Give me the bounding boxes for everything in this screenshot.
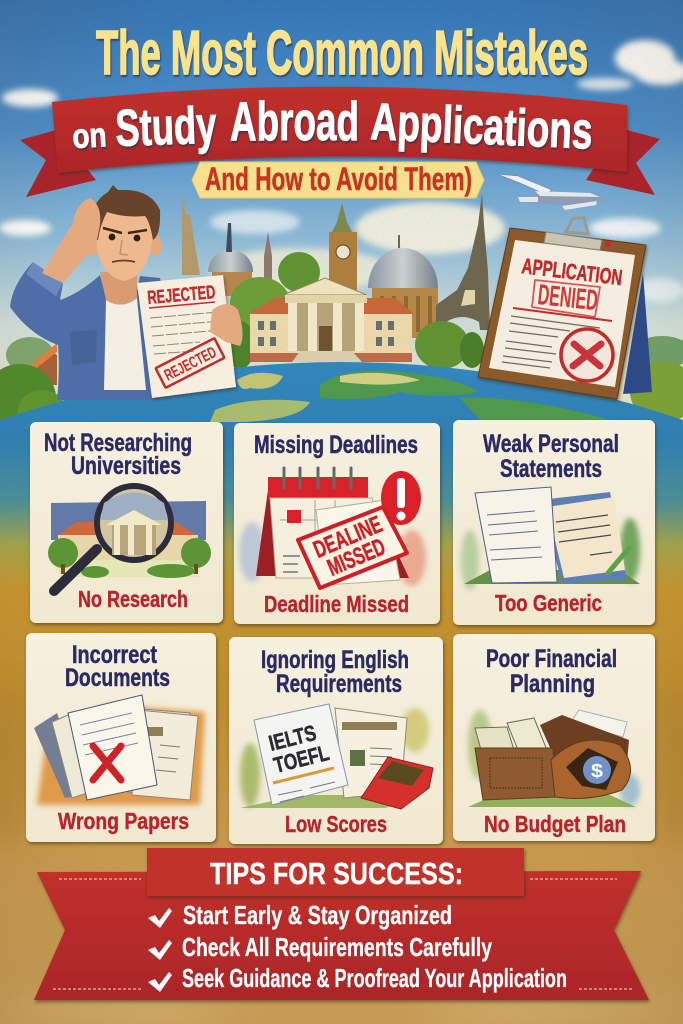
banner tails (20, 130, 96, 197)
rejected paper (137, 275, 236, 398)
forearm (42, 215, 100, 283)
rejected paper: REJECTED (162, 344, 219, 385)
card 6 heading (486, 645, 617, 698)
subtitle ribbon (192, 161, 484, 198)
clipboard: DENIED (536, 279, 599, 317)
head (95, 200, 153, 281)
deadline stamp: MISSED (324, 533, 389, 582)
neck (100, 272, 137, 305)
tip 2 (148, 932, 492, 962)
icon: ielts toefl paper and device: IELTS (266, 720, 319, 756)
banner text (71, 90, 594, 161)
card 6 caption: No Budget Plan (484, 811, 626, 837)
hair (91, 185, 160, 240)
icon: statements on folder (461, 487, 640, 590)
clock tower (329, 203, 357, 294)
large dome (368, 235, 438, 338)
subtitle ribbon: And How to Avoid Them) (205, 161, 472, 197)
background sky (0, 0, 683, 430)
icon: airplane (497, 174, 607, 210)
t-shirt (104, 298, 146, 390)
card: ignoring english requirements (229, 637, 443, 844)
tips header (147, 848, 524, 896)
tip 1 (148, 900, 452, 930)
globe (0, 362, 683, 1024)
tips body (34, 871, 649, 1000)
rejected paper: REJECTED (147, 282, 216, 309)
card 1 heading: Universities (71, 452, 181, 480)
card 5 heading (261, 646, 409, 698)
man character (10, 185, 243, 400)
card: not researching universities (30, 422, 223, 623)
hand on head (72, 198, 100, 250)
banner text: Applications (369, 93, 594, 161)
clip (544, 218, 611, 250)
tips header: TIPS FOR SUCCESS: (210, 856, 463, 891)
distant trees and house left (0, 337, 66, 432)
deadline stamp: DEALINE (309, 511, 386, 564)
icon: calendar and missed stamp (239, 468, 426, 588)
icon: ielts toefl paper and device: TOEFL (271, 740, 332, 778)
card 3 heading: Statements (500, 455, 602, 483)
hand on paper (210, 304, 243, 346)
banner text: Study (114, 97, 217, 158)
clipboard back (623, 273, 652, 394)
shirt (10, 262, 165, 400)
icon: wallet and bills (468, 710, 640, 807)
distant trees right (630, 336, 683, 422)
card 1 caption: No Research (78, 586, 188, 612)
deadline stamp (298, 507, 407, 588)
tip 2: Check All Requirements Carefully (182, 932, 492, 962)
card 1 heading (44, 429, 192, 480)
card 3 caption: Too Generic (495, 590, 602, 616)
card: poor financial planning (453, 634, 655, 841)
application denied stamp text: APPLICATION (520, 253, 624, 290)
title banner (20, 87, 660, 197)
card 4 heading: Documents (65, 664, 170, 692)
tips ribbon (34, 848, 649, 1000)
icon: campus under magnifier (48, 486, 211, 591)
paper (489, 240, 635, 387)
alert badge (381, 471, 421, 525)
clouds (0, 40, 683, 302)
banner text: Abroad (230, 90, 359, 152)
globe land masses (210, 371, 610, 422)
ears (86, 236, 162, 256)
card 5 caption: Low Scores (285, 811, 387, 837)
tip 1: Start Early & Stay Organized (183, 900, 452, 930)
rejected x circle (561, 329, 613, 381)
icon: wallet and bills: $ (591, 761, 603, 781)
card 3 heading (483, 430, 619, 483)
card 5 heading: Requirements (276, 670, 402, 698)
banner text: on (71, 116, 107, 156)
face features (103, 228, 147, 233)
landmark skyline (182, 193, 490, 369)
card: incorrect documents (26, 633, 216, 842)
university building (248, 278, 414, 362)
icon: ielts toefl paper and device (240, 704, 433, 809)
card 4 caption: Wrong Papers (58, 808, 189, 834)
obelisk tower (182, 193, 200, 275)
card: weak personal statements (453, 420, 655, 625)
card 2 caption: Deadline Missed (264, 591, 409, 617)
card: missing deadlines (234, 423, 440, 624)
card 4 heading: Incorrect (72, 641, 158, 669)
card 6 heading: Poor Financial (486, 645, 617, 673)
card 3 heading: Weak Personal (483, 430, 619, 458)
left dome (208, 223, 272, 296)
icon: paper stack with red x (34, 695, 205, 805)
ground colour patches (0, 690, 683, 1024)
card 5 heading: Ignoring English (261, 646, 409, 674)
card 4 heading (65, 641, 170, 692)
clipboard (478, 218, 652, 399)
card 1 heading: Not Researching (44, 429, 192, 457)
eiffel tower (436, 193, 490, 330)
trees (225, 252, 484, 369)
card 6 heading: Planning (510, 670, 595, 698)
card 2 heading: Missing Deadlines (254, 431, 418, 459)
